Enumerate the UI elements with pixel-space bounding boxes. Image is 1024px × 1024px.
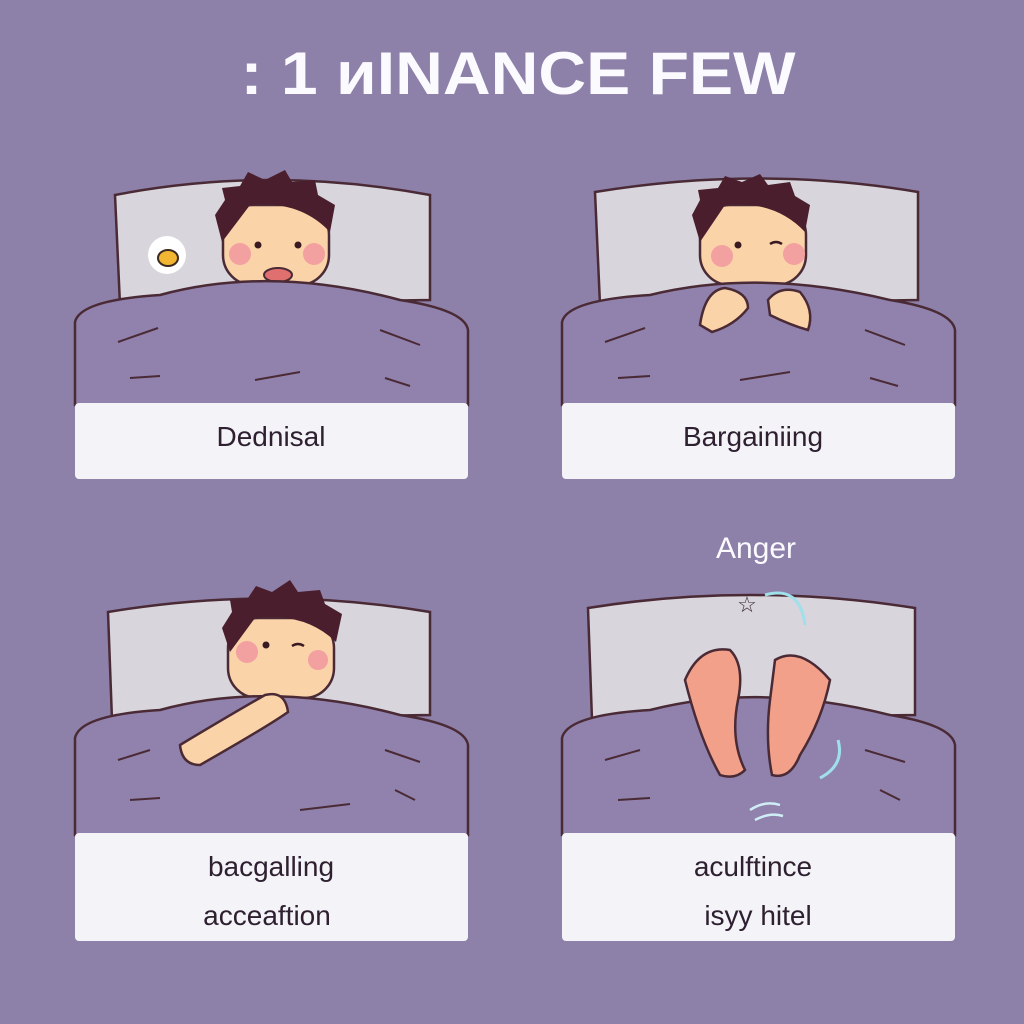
character — [215, 170, 335, 285]
arm — [180, 694, 288, 765]
pillow — [595, 178, 918, 305]
hands — [700, 288, 810, 332]
blanket — [562, 283, 955, 405]
panel: acceptance — [75, 580, 468, 941]
character — [222, 580, 342, 698]
heading: anger: Anger — [716, 532, 796, 565]
character — [692, 174, 810, 285]
pillow — [588, 595, 915, 720]
panel: anger: isyy hitel — [704, 900, 812, 931]
icon: bee — [148, 236, 186, 274]
blanket — [562, 697, 955, 835]
label text: Dednisal — [217, 421, 325, 452]
panel: acceptance: acceaftion — [203, 900, 331, 931]
icon: swoosh — [750, 803, 783, 820]
label box — [75, 833, 468, 941]
title: : 1 ᴎINANCE FEW — [240, 40, 796, 107]
panel: bargaining — [562, 174, 955, 479]
arrow: swirl — [765, 593, 805, 625]
feet — [685, 649, 830, 777]
icon: star: ☆ — [737, 592, 757, 617]
panel: anger — [562, 592, 955, 941]
label box — [75, 403, 468, 479]
blanket — [75, 281, 468, 405]
pillow — [115, 180, 430, 305]
arrow: motion — [820, 740, 840, 778]
label text: Bargainiing — [683, 421, 823, 452]
blanket — [75, 696, 468, 835]
label box — [562, 403, 955, 479]
label text: aculftince — [694, 851, 812, 882]
label text: bacgalling — [208, 851, 334, 882]
pillow — [108, 598, 430, 720]
panel: denial — [75, 170, 468, 479]
label box — [562, 833, 955, 941]
